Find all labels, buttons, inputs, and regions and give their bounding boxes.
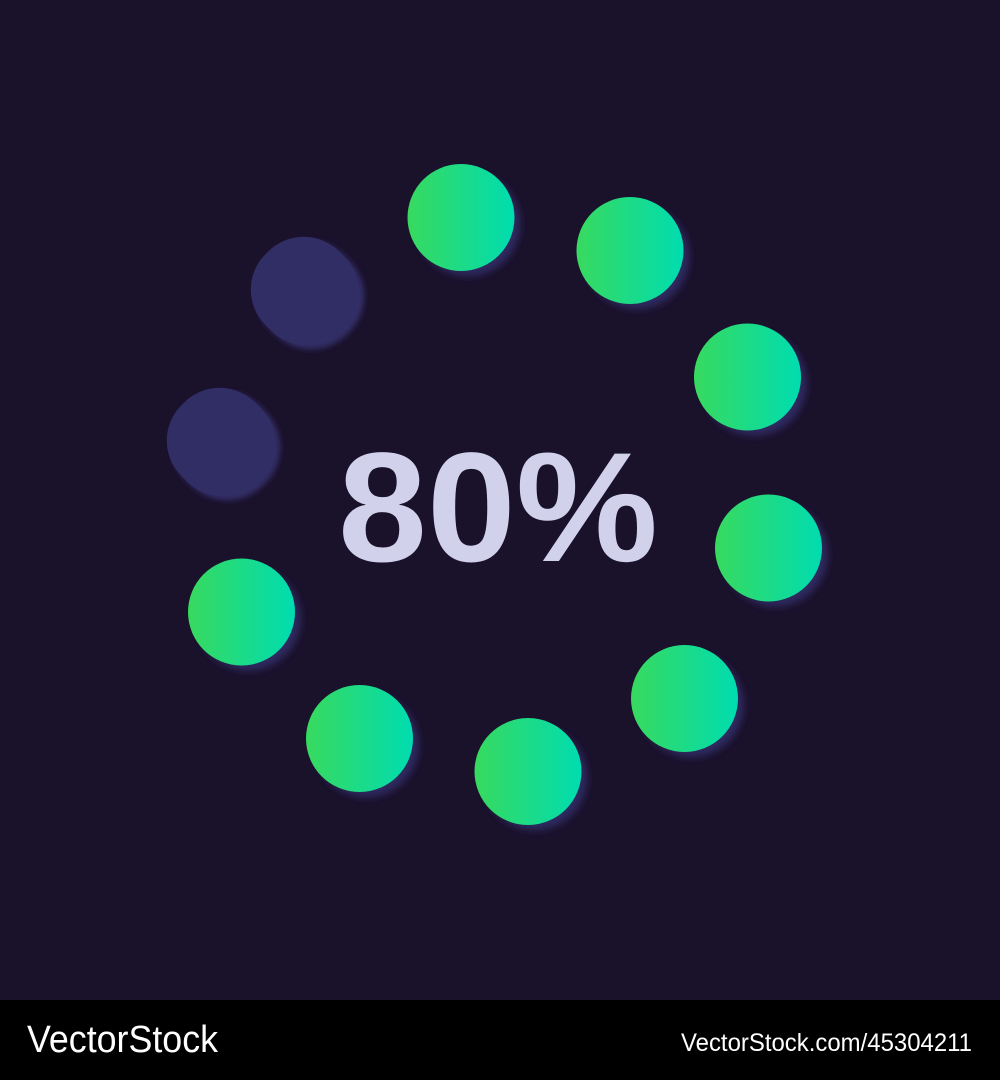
dot 1: active	[408, 164, 520, 276]
dot 3: active	[694, 324, 806, 436]
percentage label: 80%	[338, 421, 658, 595]
dot 7: active	[306, 685, 418, 797]
dot 5: active	[631, 645, 744, 757]
brand name: VectorStock	[27, 1019, 219, 1061]
dot 2: active	[576, 197, 689, 309]
dot 9: inactive	[230, 216, 385, 370]
dot 10: inactive	[146, 367, 301, 521]
dot 6: active	[474, 718, 587, 830]
progress ring	[146, 164, 827, 830]
dot 4: active	[715, 494, 828, 606]
footer bar	[0, 1000, 1000, 1080]
dot 8: active	[188, 558, 300, 670]
image id: VectorStock.com/45304211	[681, 1029, 972, 1057]
